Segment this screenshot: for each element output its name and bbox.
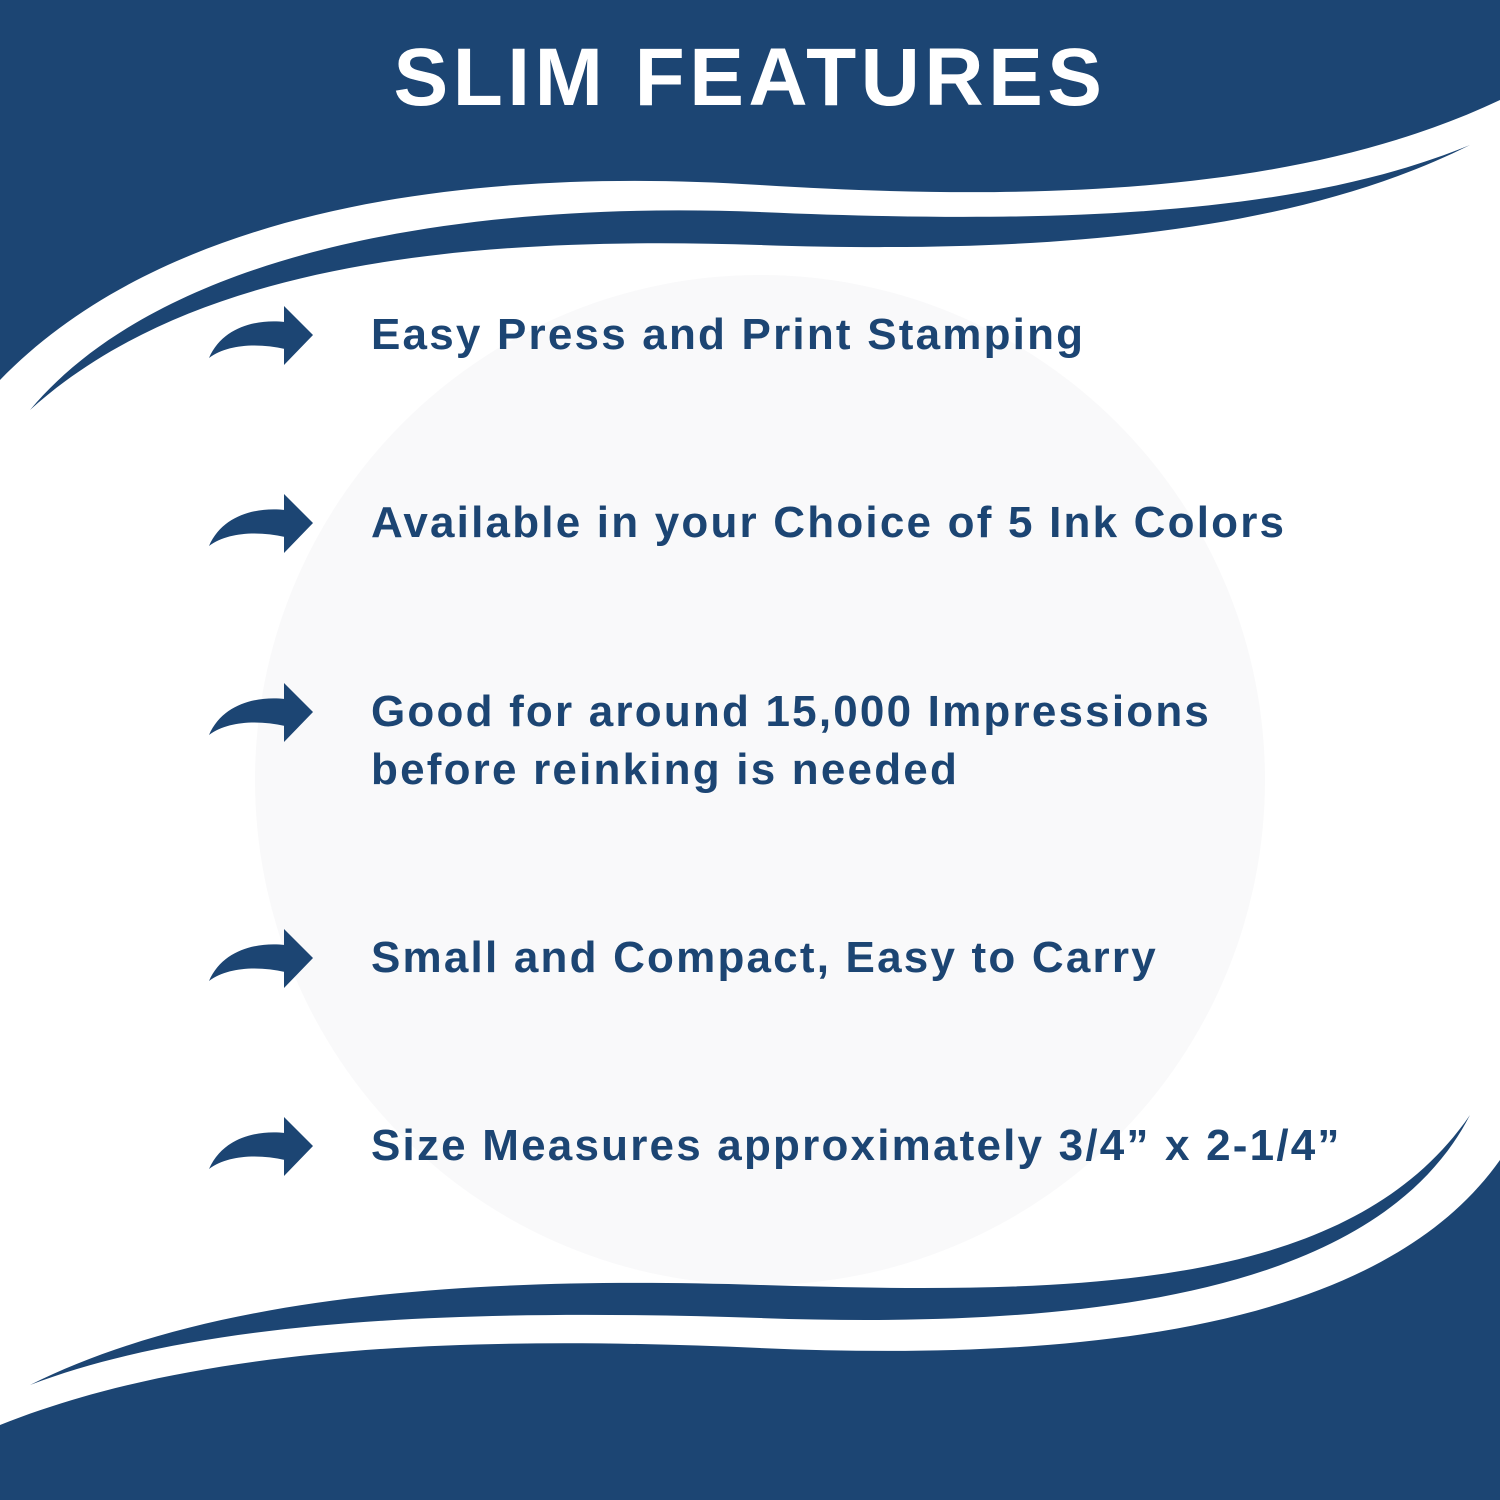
- bottom swoosh: [30, 1115, 1470, 1385]
- feature 2: Available in your Choice of 5 Ink Colors: [371, 498, 1286, 547]
- feature 4: Small and Compact, Easy to Carry: [371, 933, 1158, 982]
- title: SLIM FEATURES: [394, 32, 1106, 123]
- feature 5: Size Measures approximately 3/4” x 2-1/4”: [371, 1121, 1342, 1170]
- watermark circle: [255, 275, 1265, 1285]
- top swoosh: [30, 145, 1470, 410]
- feature 3: Good for around 15,000 Impressions: [371, 687, 1211, 736]
- feature 3: [371, 687, 1211, 794]
- feature 1: Easy Press and Print Stamping: [371, 310, 1085, 359]
- top blue band: [0, 0, 1500, 380]
- bottom blue band: [0, 1160, 1500, 1500]
- feature 3: before reinking is needed: [371, 745, 959, 794]
- arrows: [209, 306, 313, 1176]
